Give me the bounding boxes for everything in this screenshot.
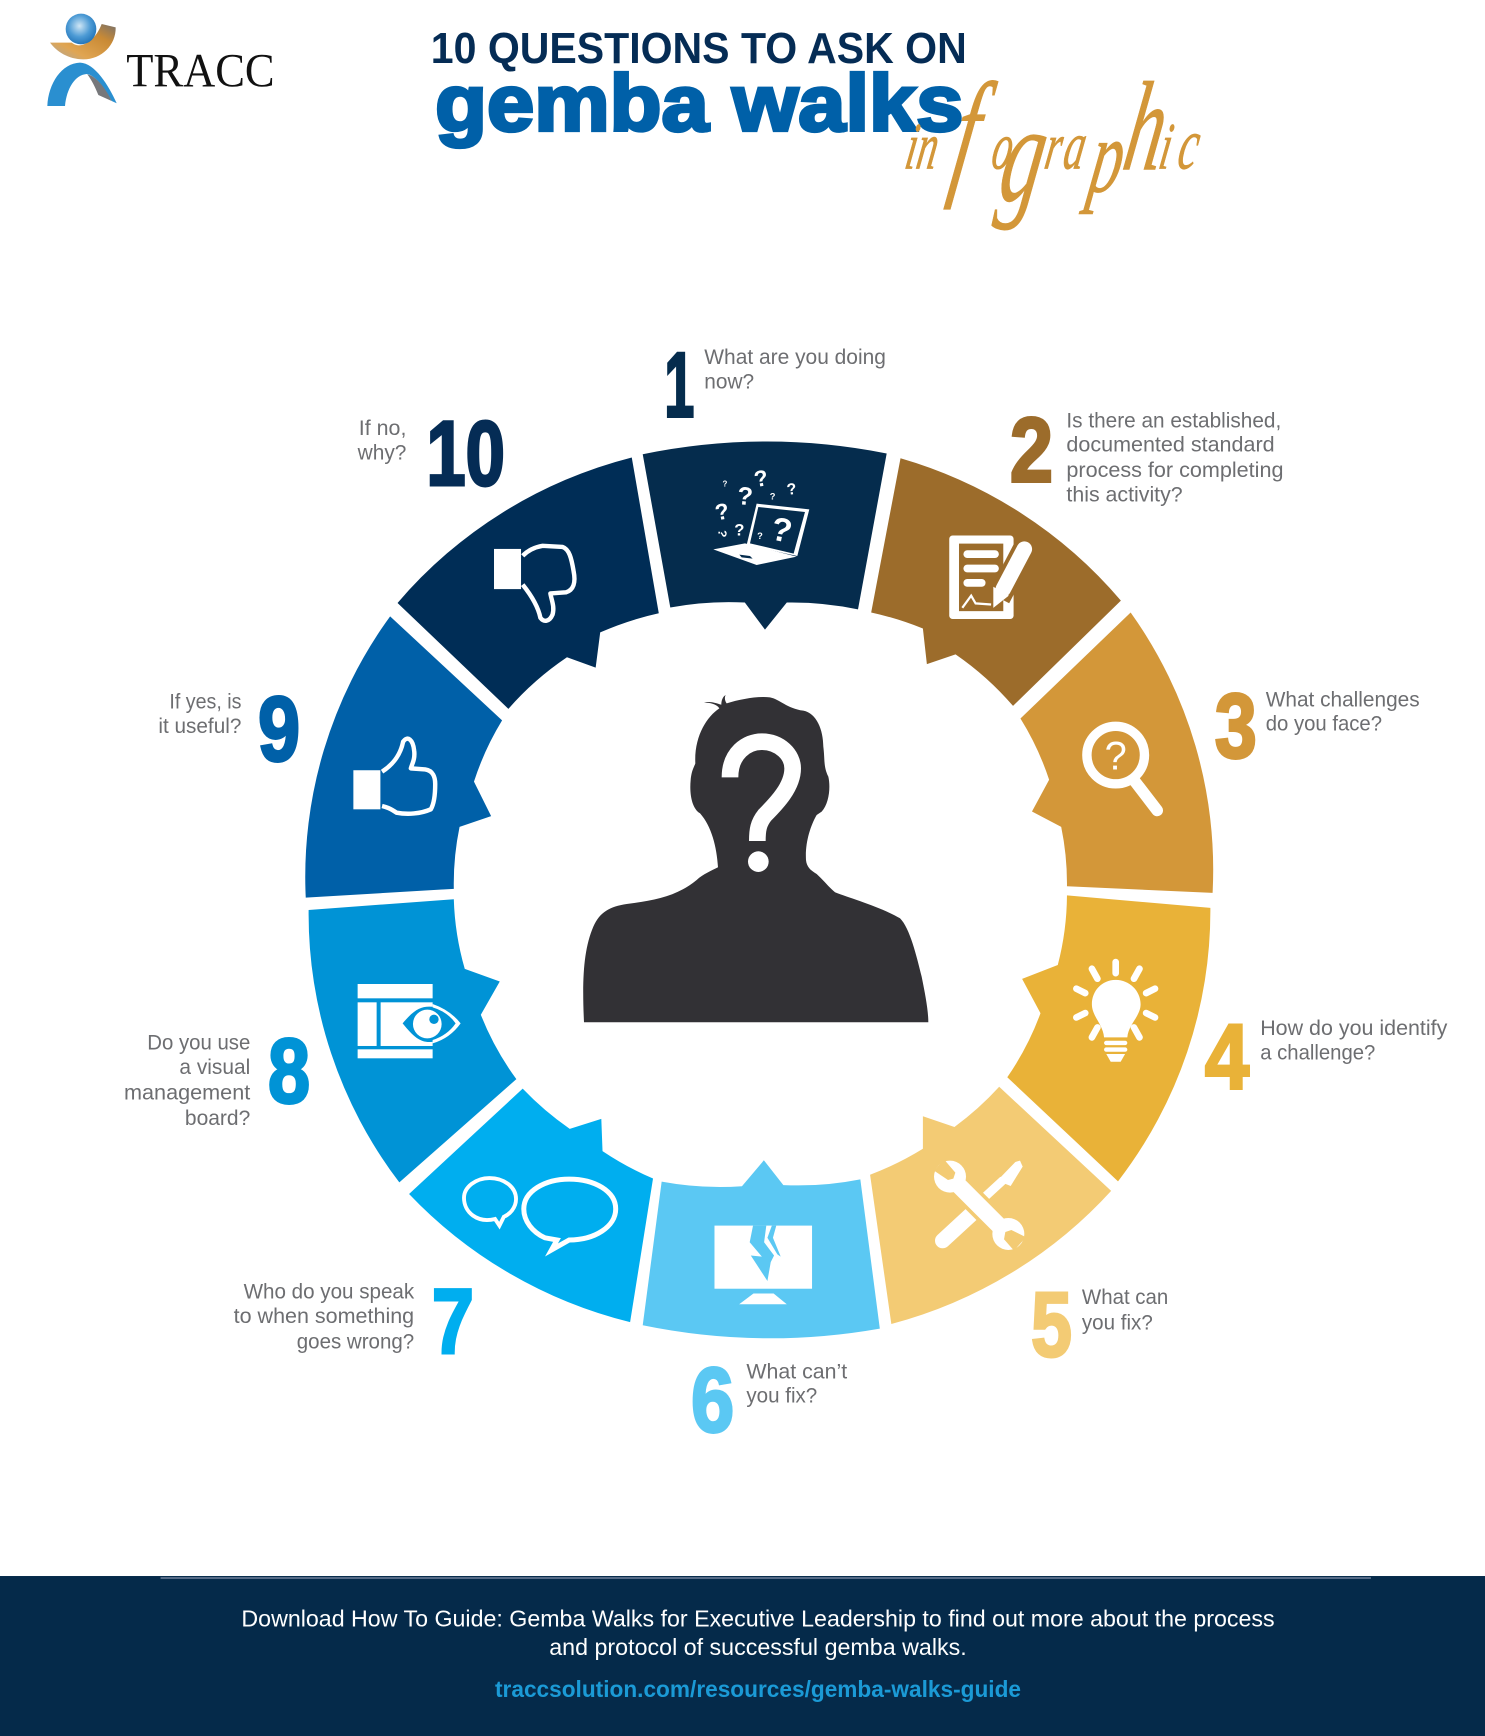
question 3: What challenges bbox=[1266, 686, 1420, 711]
icon: person silhouette with question mark bbox=[583, 695, 928, 1022]
icon: wrench and screwdriver bbox=[934, 1159, 1026, 1251]
icon: broken monitor bbox=[714, 1226, 812, 1304]
question 8 bbox=[124, 1030, 250, 1130]
title script word: i bbox=[1155, 110, 1179, 183]
icon: laptop with question marks bbox=[713, 464, 809, 565]
question 7 bbox=[234, 1279, 414, 1353]
question 10: why? bbox=[357, 439, 406, 464]
logo: TRACC bbox=[47, 14, 275, 106]
question 7: goes wrong? bbox=[297, 1329, 414, 1353]
icon: laptop with question marks: ? bbox=[757, 531, 763, 541]
question 7: to when something bbox=[234, 1303, 414, 1328]
question 8: board? bbox=[185, 1105, 250, 1130]
title bbox=[431, 24, 1215, 232]
icon: visual board with eye bbox=[358, 984, 461, 1058]
icon: document and pen bbox=[949, 536, 1025, 619]
title line 2: gemba walks bbox=[435, 59, 963, 148]
number 2: 2 bbox=[1010, 400, 1053, 502]
question 2: process for completing bbox=[1066, 457, 1283, 482]
question 5: you fix? bbox=[1082, 1310, 1153, 1335]
footer text: Download How To Guide: Gemba Walks for Executive Leadership to find out more about the process bbox=[241, 1605, 1275, 1631]
question 3: do you face? bbox=[1266, 711, 1382, 736]
question 6 bbox=[746, 1358, 847, 1408]
icon: magnifying glass with question mark: ? bbox=[1105, 734, 1127, 778]
question 7: Who do you speak bbox=[244, 1279, 414, 1304]
segment 3 bbox=[1020, 612, 1213, 893]
title script word: r bbox=[1040, 110, 1069, 183]
icon: laptop with question marks: ? bbox=[752, 464, 770, 492]
segment 10 bbox=[398, 457, 659, 709]
number 9: 9 bbox=[258, 679, 300, 781]
ring of ten segments bbox=[305, 442, 1213, 1338]
question 9: it useful? bbox=[158, 713, 241, 738]
icon: laptop with question marks: ? bbox=[715, 529, 730, 538]
icon: thumbs up bbox=[353, 739, 435, 814]
question 9: If yes, is bbox=[169, 689, 242, 714]
icon: laptop with question marks: ? bbox=[768, 511, 795, 551]
icon: light bulb bbox=[1076, 962, 1155, 1062]
number 3: 3 bbox=[1215, 675, 1257, 777]
title script word: h bbox=[1115, 55, 1179, 197]
segment 7 bbox=[409, 1089, 653, 1322]
question 10 bbox=[357, 415, 406, 464]
title script word: g bbox=[990, 77, 1060, 232]
icon: laptop with question marks: ? bbox=[713, 497, 731, 525]
logo wordmark: TRACC bbox=[126, 45, 275, 97]
icon: laptop with question marks: ? bbox=[734, 521, 744, 540]
title script word: i bbox=[901, 110, 925, 183]
question 6: What can’t bbox=[746, 1358, 847, 1383]
question 5 bbox=[1082, 1284, 1168, 1335]
number 7: 7 bbox=[432, 1271, 474, 1373]
segment 4 bbox=[1007, 895, 1210, 1181]
title script word: f bbox=[942, 55, 1004, 211]
title script word: c bbox=[1173, 105, 1206, 185]
segment 8 bbox=[309, 899, 516, 1182]
question 2 bbox=[1066, 407, 1283, 507]
icon: laptop with question marks: ? bbox=[723, 480, 728, 489]
icon: laptop with question marks: ? bbox=[770, 492, 776, 502]
icon: laptop with question marks: ? bbox=[786, 481, 798, 499]
question 3 bbox=[1266, 686, 1420, 736]
segment 9 bbox=[305, 616, 502, 898]
question 2: this activity? bbox=[1066, 482, 1183, 507]
question 6: you fix? bbox=[746, 1383, 817, 1408]
title line 1: 10 QUESTIONS TO ASK ON bbox=[431, 24, 967, 73]
icon: figure emblem bbox=[47, 14, 117, 106]
segment 5 bbox=[870, 1087, 1111, 1324]
question 1: What are you doing bbox=[704, 344, 886, 369]
number 4: 4 bbox=[1205, 1006, 1249, 1108]
segment 1 bbox=[643, 442, 887, 630]
number 6: 6 bbox=[691, 1350, 734, 1452]
title script word: n bbox=[912, 110, 945, 183]
question 9 bbox=[158, 689, 242, 738]
segment 2 bbox=[871, 458, 1121, 706]
question 4: a challenge? bbox=[1260, 1040, 1375, 1065]
footer band bbox=[0, 1576, 1485, 1736]
question 5: What can bbox=[1082, 1284, 1168, 1309]
footer text bbox=[241, 1605, 1275, 1660]
question 2: documented standard bbox=[1066, 432, 1275, 457]
question 2: Is there an established, bbox=[1066, 407, 1281, 432]
footer text: and protocol of successful gemba walks. bbox=[549, 1634, 967, 1660]
title script word: p bbox=[1078, 98, 1135, 214]
number 1: 1 bbox=[664, 334, 694, 436]
number 5: 5 bbox=[1031, 1274, 1072, 1376]
question 8: a visual bbox=[179, 1054, 250, 1079]
question 8: management bbox=[124, 1079, 250, 1104]
icon: speech bubbles bbox=[464, 1178, 616, 1250]
number 8: 8 bbox=[268, 1021, 310, 1123]
question 1 bbox=[704, 344, 886, 394]
question 4 bbox=[1260, 1015, 1448, 1065]
segment 6 bbox=[643, 1160, 880, 1338]
question 1: now? bbox=[704, 369, 754, 394]
question 10: If no, bbox=[359, 415, 406, 440]
question 4: How do you identify bbox=[1260, 1015, 1448, 1040]
number 10: 10 bbox=[426, 403, 505, 505]
icon: laptop with question marks: ? bbox=[736, 482, 754, 511]
question 8: Do you use bbox=[147, 1030, 250, 1055]
footer link: traccsolution.com/resources/gemba-walks-guide bbox=[495, 1676, 1021, 1702]
title script word: o bbox=[987, 110, 1020, 183]
title script word: a bbox=[1059, 108, 1093, 184]
icon: magnifying glass with question mark bbox=[1087, 726, 1157, 810]
icon: thumbs down bbox=[494, 546, 574, 621]
